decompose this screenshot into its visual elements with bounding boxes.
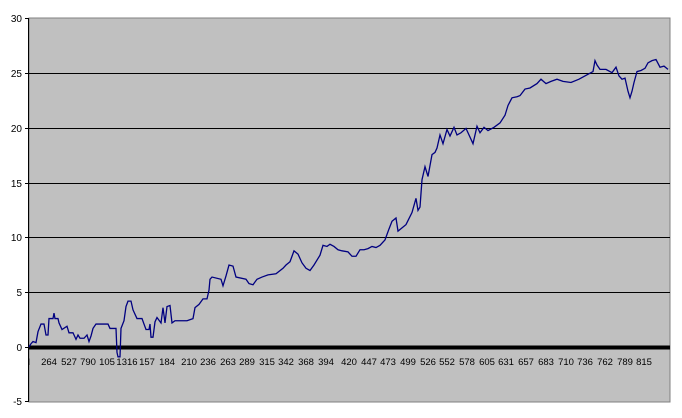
- x axis labels: 578: [459, 357, 475, 368]
- x axis labels: 762: [597, 357, 613, 368]
- x axis labels: 631: [498, 357, 514, 368]
- x axis labels: 420: [341, 357, 357, 368]
- x axis labels: 710: [558, 357, 574, 368]
- zero axis: [29, 346, 670, 350]
- y axis labels: 25: [11, 69, 22, 80]
- y axis labels: [11, 14, 22, 408]
- x axis labels: 605: [479, 357, 495, 368]
- y axis labels: 30: [11, 14, 22, 25]
- x axis labels: 342: [278, 357, 294, 368]
- x axis labels: 394: [318, 357, 334, 368]
- x axis labels: 815: [636, 357, 652, 368]
- x axis labels: 657: [518, 357, 534, 368]
- x axis labels: 157: [139, 357, 155, 368]
- data line: [29, 60, 668, 357]
- x axis labels: 368: [298, 357, 314, 368]
- x axis labels: 1316: [116, 357, 138, 368]
- y axis labels: 0: [16, 343, 22, 354]
- y axis labels: 20: [11, 124, 22, 135]
- x axis labels: 264: [41, 357, 57, 368]
- x axis labels: 236: [200, 357, 216, 368]
- x axis labels: I: [28, 357, 30, 368]
- y axis labels: 10: [11, 233, 22, 244]
- x axis labels: 789: [617, 357, 633, 368]
- x axis labels: [28, 357, 652, 368]
- x axis labels: 790: [80, 357, 96, 368]
- x axis labels: 315: [259, 357, 275, 368]
- x axis labels: 552: [439, 357, 455, 368]
- x axis labels: 105: [99, 357, 115, 368]
- y axis labels: 5: [16, 288, 22, 299]
- x axis labels: 526: [420, 357, 436, 368]
- x axis labels: 527: [61, 357, 77, 368]
- x axis labels: 473: [380, 357, 396, 368]
- y axis labels: -5: [13, 397, 22, 408]
- x axis labels: 499: [400, 357, 416, 368]
- x axis labels: 210: [181, 357, 197, 368]
- x axis labels: 447: [361, 357, 377, 368]
- y axis labels: 15: [11, 179, 22, 190]
- x axis labels: 683: [538, 357, 554, 368]
- x axis labels: 263: [220, 357, 236, 368]
- x axis labels: 736: [577, 357, 593, 368]
- x axis labels: 289: [239, 357, 255, 368]
- x axis labels: 184: [159, 357, 175, 368]
